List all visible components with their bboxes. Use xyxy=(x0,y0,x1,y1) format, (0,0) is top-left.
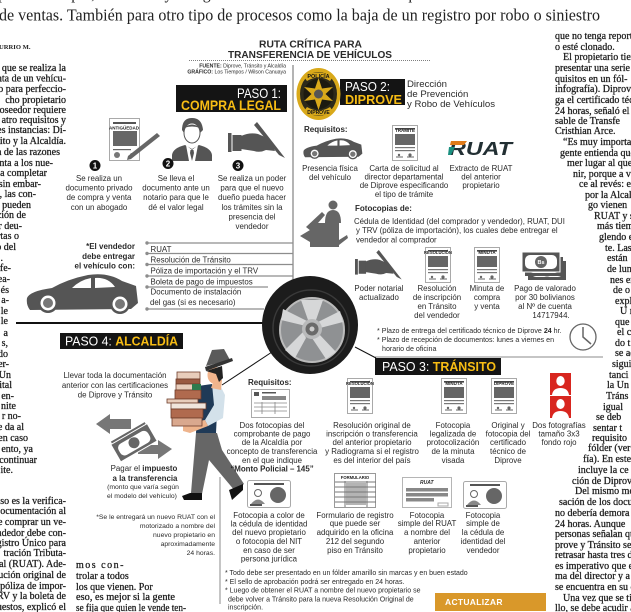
panel: paso 1 compra legal xyxy=(27,85,293,314)
article text: second column bottom: mos con- xyxy=(76,560,125,571)
diprove description: de Prevención xyxy=(407,89,468,100)
paso 1 heading: COMPRA LEGAL xyxy=(181,97,281,113)
diprove description xyxy=(407,79,495,110)
requisite: payment xyxy=(514,284,577,320)
article text: right column: sentar t xyxy=(593,423,622,434)
icon: certificate copy: DIPROVE xyxy=(494,381,514,386)
article text: right column: 24 horas. Aunque xyxy=(555,519,626,530)
requisite: letter: el tipo de trámite xyxy=(375,190,434,199)
icon: hand notary power xyxy=(355,250,402,280)
new RUAT note: 24 horas. xyxy=(187,550,215,557)
requisite: certificate: certificado xyxy=(490,438,527,447)
icon: resolution document xyxy=(424,248,452,282)
icon: hand signing xyxy=(228,122,285,158)
article text: right column: go vienen xyxy=(588,200,627,211)
icon: letter document: TRÁMITE xyxy=(395,127,415,133)
list of documents from seller xyxy=(145,241,293,311)
article text: right column: te. Las xyxy=(605,243,631,254)
article text: right column: de lun xyxy=(607,264,631,275)
new RUAT note: *Se le entregará un nuevo RUAT con el xyxy=(96,514,215,521)
article text: right column: do t xyxy=(615,338,630,349)
requisite: receipt copies: concepto de transferencia xyxy=(227,447,318,456)
icon: police badge xyxy=(296,68,340,120)
requisite: seller id: identidad del xyxy=(461,537,506,546)
requisite: certificate: Diprove xyxy=(494,456,522,465)
requisite: payment: 14717944. xyxy=(532,311,570,320)
requisite: legal copy: Fotocopia xyxy=(436,421,471,430)
list of documents from seller: Boleta de pago de impuestos xyxy=(150,278,253,286)
article text: left column: cho propietario xyxy=(5,95,66,106)
paso 2 heading: PASO 2: xyxy=(345,80,390,94)
requisite: original resolution: es del interior del país xyxy=(333,456,411,465)
list of documents from seller: Resolución de Tránsito xyxy=(150,256,231,264)
article text: left column: atro requisitos y xyxy=(2,115,66,126)
infographic title: RUTA CRÍTICA PARA xyxy=(259,38,362,50)
article text: second column bottom xyxy=(76,560,186,612)
article text: second column bottom: eso, es mejor si la gente xyxy=(76,592,176,603)
panel: paso 3 transito xyxy=(316,358,586,555)
tax payment text: Pagar el impuesto xyxy=(111,464,178,473)
icon: car xyxy=(27,274,138,314)
step numbers: 2 xyxy=(166,160,171,168)
icon: red photos xyxy=(550,373,571,418)
icon: RUAT copy xyxy=(402,478,452,508)
requisite: form: 212 del segundo xyxy=(326,537,385,546)
requisite: payment: por 30 bolivianos xyxy=(515,293,575,302)
article text: left column: r no- xyxy=(2,411,21,422)
footnotes: * Luego de obtener el RUAT a nombre del nuevo propietario se xyxy=(225,588,421,594)
step 4 intro text: de Diprove y Tránsito xyxy=(78,390,153,400)
icon: registration form: FORMULARIO xyxy=(341,475,370,480)
step 1 text: con un abogado xyxy=(71,203,128,212)
article text: right column xyxy=(555,31,631,612)
seller note: el vehículo con: xyxy=(75,262,135,270)
step 2 text: Se lleva el xyxy=(158,174,194,183)
step 1 text: Se realiza un xyxy=(76,174,122,183)
photocopies text: y TRV (póliza de importación), los cuales debe entregar el xyxy=(356,226,558,235)
requisite: ruat extract: del anterior xyxy=(461,172,501,182)
paso 4 heading: PASO 4: ALCALDÍA xyxy=(65,334,179,348)
article text: right column: están xyxy=(607,253,628,264)
requisite: legal copy: protocolización xyxy=(427,438,479,447)
icon: resolution copy xyxy=(346,378,374,414)
step 2 text xyxy=(142,174,210,212)
source credits: FUENTE: Diprove, Tránsito y Alcaldía xyxy=(199,64,286,70)
requisite: original resolution: Resolución original de xyxy=(333,421,411,430)
step 3 text: Se realiza un poder xyxy=(218,174,287,183)
article text: right column: ma del director y a xyxy=(555,571,631,582)
article text: left column: ocumentación al xyxy=(0,506,66,517)
footnotes: * Todo debe ser presentado en un fólder amarillo sin marcas y en buen estado xyxy=(225,570,468,577)
article text: right column: presentar una serie xyxy=(555,63,631,74)
photocopies text: vendedor al comprador xyxy=(356,236,437,244)
step 1 text: documento privado xyxy=(65,184,133,192)
article text: left column: oseedor requiere xyxy=(0,105,67,116)
icon: resolution document: RESOLUCIÓN xyxy=(424,250,452,255)
requisite: receipt copies xyxy=(227,421,318,474)
tax payment text: (monto que varía según xyxy=(107,484,179,491)
requisite: photos: fondo rojo xyxy=(541,438,577,447)
requisite: letter: director departamental xyxy=(365,172,444,182)
photocopies text: Fotocopias de: xyxy=(355,204,412,213)
requisite: vehicle: del vehículo xyxy=(309,173,352,182)
article text: left column: . xyxy=(0,253,3,264)
article text: right column: tanci xyxy=(609,370,629,381)
photocopies text xyxy=(354,204,565,244)
requisite: original resolution xyxy=(325,421,420,465)
article text: left column xyxy=(0,63,67,612)
footnotes xyxy=(225,570,468,612)
icon: registration form xyxy=(334,474,376,508)
step 3 text: presencia del xyxy=(229,212,276,222)
icon: police badge: DIPROVE xyxy=(307,110,330,116)
requisite: minute: Minuta de xyxy=(470,284,505,293)
article text: left column: a completar xyxy=(0,168,48,179)
list of documents from seller: RUAT xyxy=(150,245,172,254)
article text: left column: en- xyxy=(1,391,14,402)
new RUAT note: aproximadamente xyxy=(161,541,215,548)
diprove description: y Robo de Vehículos xyxy=(407,99,495,110)
article text: right column: fía). En este xyxy=(583,454,631,465)
requisite: certificate xyxy=(486,421,531,465)
step 2 text: documento ante un xyxy=(142,184,210,192)
requisite: RUAT copy: simple del RUAT xyxy=(398,519,456,528)
seller note: debe entregar xyxy=(82,252,135,261)
step 2 text: notario para que le xyxy=(143,193,210,202)
requisite: minute: y venta xyxy=(474,302,500,311)
requisite: RUAT copy: Fotocopia xyxy=(410,511,445,520)
illustration: man carrying books xyxy=(167,349,244,500)
icon: seller id card xyxy=(464,482,506,508)
article text: right column: se deb xyxy=(596,412,621,423)
list of documents from seller: Póliza de importación y el TRV xyxy=(150,266,259,276)
article text: right column: de o xyxy=(613,285,630,296)
requisite: seller id: simple de xyxy=(466,519,500,528)
requisite: seller id: la cédula de xyxy=(462,528,505,537)
icon: minute copy: MINUTA xyxy=(445,381,463,386)
requisite: RUAT copy: propietario xyxy=(408,546,446,555)
requisite: ruat extract: propietario xyxy=(462,181,500,190)
requisite: notary power xyxy=(354,284,404,302)
step 3 text xyxy=(218,174,287,231)
article text: right column: es imperativo que e xyxy=(555,561,631,572)
requisite: payment: Pago de valorado xyxy=(514,284,577,293)
article text: left column: póliza de impor- xyxy=(0,581,66,592)
requisite: RUAT copy xyxy=(398,511,456,555)
requisite: resolution: del vendedor xyxy=(414,311,460,320)
icon: certificate copy xyxy=(492,378,516,414)
step 4 intro text xyxy=(62,371,168,400)
requisite: buyer id: persona jurídica xyxy=(241,554,298,564)
icon: RUAT logo: RUAT xyxy=(449,139,515,159)
article text: right column: sigui xyxy=(612,359,631,370)
requisite: buyer id xyxy=(231,511,307,564)
requisite: form: piso en Tránsito xyxy=(327,546,383,555)
requisite: minute xyxy=(470,284,505,311)
step 1 text xyxy=(65,174,133,212)
icon: person at desk xyxy=(300,200,348,247)
infographic title xyxy=(189,38,431,61)
requisite: RUAT copy: anterior xyxy=(414,537,441,546)
deadlines note: * Plazo de entrega del certificado técnico de Diprove 24 hr. xyxy=(377,327,562,335)
step 3 text: vendedor xyxy=(236,222,269,231)
requisite: buyer id: del nuevo propietario xyxy=(232,528,306,537)
article text: right column: Cristhian Arce. xyxy=(555,126,616,137)
requisite: notary power: actualizado xyxy=(359,293,400,302)
new RUAT note: motorizado a nombre del xyxy=(140,523,215,530)
article text: left column: le xyxy=(1,316,9,327)
paso 1 heading: PASO 1: xyxy=(237,85,281,101)
requisite: original resolution: del anterior propietario xyxy=(333,438,412,447)
tax payment text xyxy=(107,464,179,500)
article text: right column: requisito xyxy=(592,433,627,444)
requisite: photos: Dos fotografías xyxy=(532,421,586,430)
tax payment text: el modelo del vehículo) xyxy=(107,493,177,500)
footnotes: inscripción. xyxy=(228,604,263,612)
article text: right column: o esté clonado. xyxy=(555,42,615,53)
article text: right column: mer lugar al que xyxy=(567,158,631,169)
requisite: form: adquirido en la oficina xyxy=(317,528,394,537)
icon: buyer id card xyxy=(248,480,290,508)
requisite: receipt copies: Dos fotocopias del xyxy=(240,421,305,430)
panel: paso 4 alcaldia xyxy=(60,333,468,612)
article text: right column: que xyxy=(615,317,630,328)
requisite: buyer id: la cédula de identidad xyxy=(231,520,307,528)
requisite: resolution: de inscripción xyxy=(413,293,461,302)
article text: right column: fólder (ver xyxy=(588,443,631,454)
update button xyxy=(435,593,546,611)
article text: right column: retrasar hasta tres d xyxy=(555,550,631,561)
step 4 intro text: anterior con las certificaciones xyxy=(62,381,168,390)
requisite: letter: de Diprove especificando xyxy=(360,181,449,190)
requisite: form: Formulario de registro xyxy=(316,511,394,520)
paso 2 heading xyxy=(340,79,405,107)
article text: left column: tración Tributa- xyxy=(4,548,66,559)
requisite: original resolution: y Radiograma si el registro xyxy=(325,447,420,456)
step 3 text: para que el nuevo xyxy=(220,184,284,192)
step 3 text: los trámites sin la xyxy=(222,203,283,212)
list of documents from seller: Documento de instalación xyxy=(150,288,241,296)
icon: minute document: MINUTA xyxy=(478,250,496,255)
requisite: buyer id: Fotocopia a color de xyxy=(233,511,305,520)
requisite: receipt copies: de la Alcaldía por xyxy=(242,438,303,447)
icon: private document with pen xyxy=(109,118,160,160)
requisite: receipt copies: “Monto Policial – 145” xyxy=(230,464,314,474)
source credits: GRÁFICO: Los Tiempos / Wilson Canuaya xyxy=(187,68,286,76)
article text: left column: a- xyxy=(1,295,9,306)
requisite: legal copy: legalizada de xyxy=(430,430,477,438)
article text: right column: la Un xyxy=(607,380,629,391)
icon: letter document xyxy=(392,126,418,160)
deadlines note xyxy=(377,327,562,353)
tax payment text: a la transferencia xyxy=(113,474,178,483)
headline: de ventas. También para otro tipo de procesos como la baja de un registro por robo o siniestro xyxy=(0,6,600,24)
icon: police badge: POLICÍA xyxy=(307,72,330,80)
seller note: *El vendedor xyxy=(86,242,135,251)
requisite: vehicle: Presencia física xyxy=(302,164,358,173)
article text: left column: continuar xyxy=(0,455,38,466)
requisite: resolution: en Tránsito xyxy=(417,302,457,311)
requisite: notary power: Poder notarial xyxy=(354,284,404,293)
paso 3 heading: PASO 3: TRÁNSITO xyxy=(382,359,496,374)
requisite: letter: Carta de solicitud al xyxy=(369,164,439,173)
paso 2 heading: DIPROVE xyxy=(345,93,402,107)
step 1 text: de compra y venta xyxy=(67,193,132,202)
icon: payment receipt xyxy=(252,390,290,418)
article text: left column: a xyxy=(4,328,9,339)
article text: right column: incluye la ce xyxy=(578,465,629,476)
requisite: ruat extract: Extracto de RUAT xyxy=(450,164,513,173)
icon: resolution copy: RESOLUCIÓN xyxy=(346,381,374,386)
article text: left column: e comprar un ve- xyxy=(0,517,66,528)
requisite: resolution: Resolución xyxy=(417,284,457,293)
update button: ACTUALIZAR xyxy=(445,597,503,607)
requisite: payment: al Nº de cuenta xyxy=(518,302,572,311)
article text: left column: le xyxy=(1,306,9,317)
icon: minute copy xyxy=(442,378,466,414)
article text: left column: que se realiza la xyxy=(2,63,67,74)
requisitos heading: Requisitos: xyxy=(248,378,292,387)
requisite: photos: tamaño 3x3 xyxy=(538,430,580,438)
article text: left column: fe- xyxy=(0,263,11,274)
article text: right column: igual xyxy=(603,402,623,413)
article text: second column bottom: trolar a todos xyxy=(76,571,129,582)
article text: right column: 24 horas, señaló el xyxy=(555,106,630,117)
requisite: seller id: Fotocopia xyxy=(466,511,501,520)
icon: minute document xyxy=(474,248,500,282)
requisite: receipt copies: en el que indique xyxy=(242,456,303,465)
requisite: seller id xyxy=(461,511,506,555)
icon: money with arrows xyxy=(96,414,172,462)
requisitos heading: Requisitos: xyxy=(304,125,348,134)
requisite: receipt copies: comprobante de pago xyxy=(234,430,311,438)
paso 1 heading xyxy=(176,85,287,113)
article text: left column: ite. xyxy=(0,465,13,476)
requisite: form xyxy=(316,511,394,555)
article text: right column: prove y Tránsito se xyxy=(555,540,631,551)
icon: notary xyxy=(172,118,212,161)
article text: left column: és xyxy=(1,285,9,296)
footnotes: * El sello de aprobación podrá ser entregado en 24 horas. xyxy=(225,579,404,586)
seller note xyxy=(75,242,135,270)
step 4 intro text: Llevar toda la documentación xyxy=(63,371,167,380)
requisite: resolution xyxy=(413,284,461,320)
article text: left column: nite xyxy=(1,401,17,412)
article text: right column: por la Alcal xyxy=(585,190,631,201)
article text: right column: sación de los docu xyxy=(559,497,631,508)
article text: right column: Tráns xyxy=(606,391,629,402)
step numbers xyxy=(90,158,244,171)
icon: banknotes xyxy=(522,252,566,280)
requisite: letter xyxy=(360,164,449,199)
step 2 text: dé el valor legal xyxy=(148,203,204,212)
new RUAT note xyxy=(96,514,215,557)
requisite: certificate: técnico de xyxy=(490,447,527,456)
source credits xyxy=(187,64,286,76)
icon: clock xyxy=(570,324,596,350)
icon: banknotes: Bs xyxy=(537,260,545,266)
icon: tire xyxy=(262,276,358,374)
requisite: certificate: Original y xyxy=(491,421,525,430)
deadlines note: * Plazo de recepción de documentos: lunes a viernes en xyxy=(377,336,554,344)
article text: left column: ento, ya xyxy=(1,444,34,455)
requisite: vehicle xyxy=(302,164,358,182)
article text: left column: pueden xyxy=(2,200,31,211)
step numbers: 3 xyxy=(236,162,241,170)
requisite: photos xyxy=(532,421,586,447)
panel: paso 2 diprove xyxy=(296,68,596,353)
article text: left column: s, xyxy=(2,338,8,349)
icon: RUAT copy: RUAT xyxy=(420,480,434,486)
icon: car small xyxy=(303,138,362,159)
list of documents from seller: del gas (si es necesario) xyxy=(150,298,236,307)
requisite: seller id: vendedor xyxy=(467,546,500,555)
requisite: buyer id: o fotocopia del NIT xyxy=(236,537,302,546)
new RUAT note: nuevo propietario en xyxy=(153,532,215,539)
icon: private document with pen: ANTIGÜEDAD xyxy=(109,124,140,130)
diprove description: Dirección xyxy=(407,79,447,90)
requisite: ruat extract xyxy=(450,164,513,190)
footnotes: debe volver a Tránsito para la nueva Resolución Original de xyxy=(228,596,414,604)
step numbers: 1 xyxy=(93,162,98,170)
requisite: RUAT copy: a nombre del xyxy=(404,528,450,537)
infographic title: TRANSFERENCIA DE VEHÍCULOS xyxy=(228,48,392,61)
requisite: legal copy xyxy=(427,421,479,465)
requisite: minute: compra xyxy=(474,293,501,302)
article text: right column: quisitos en un fól- xyxy=(555,74,628,85)
article text: right column: no debería demora xyxy=(555,508,630,519)
step 3 text: dueño pueda hacer xyxy=(218,193,286,202)
requisite: buyer id: en caso de ser xyxy=(243,546,295,555)
requisite: legal copy: visada xyxy=(442,456,465,465)
requisite: original resolution: inscripción o transferencia xyxy=(326,430,418,438)
requisite: legal copy: de la minuta xyxy=(432,447,475,456)
requisite: form: que puede ser xyxy=(330,519,381,528)
deadlines note: horario de oficina xyxy=(382,345,436,353)
article text: second column bottom: los que vienen. Por xyxy=(76,582,153,593)
photocopies text: Cédula de Identidad (del comprador y vendedor), RUAT, DUI xyxy=(354,217,565,226)
article text: right column: sable de Transfe xyxy=(555,116,621,127)
requisite: certificate: fotocopia del xyxy=(486,430,531,438)
